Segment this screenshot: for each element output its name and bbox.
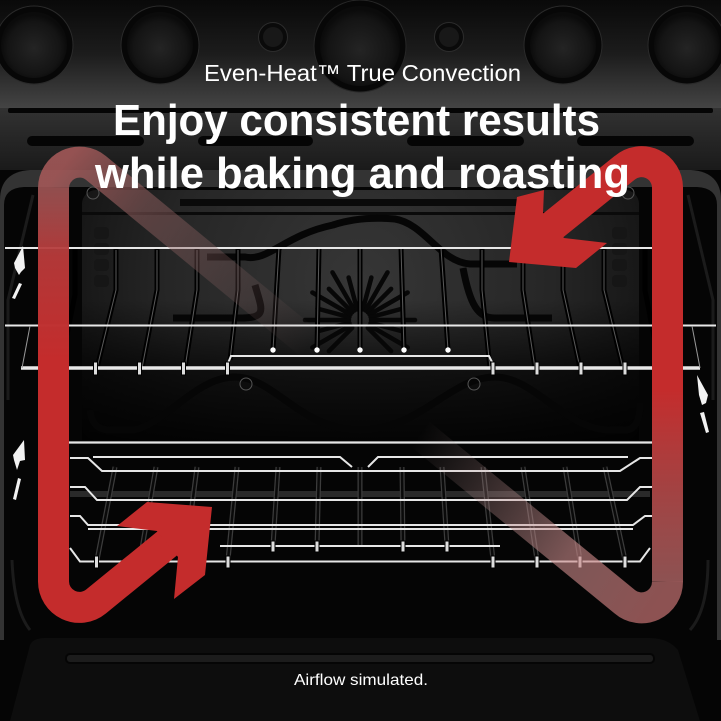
headline: Enjoy consistent results xyxy=(113,96,600,145)
door lower panel xyxy=(10,638,700,721)
arrow: top-right airflow with head xyxy=(509,162,668,390)
control panel xyxy=(0,0,721,108)
footnote: Airflow simulated. xyxy=(294,672,428,689)
arrow: left airflow loop rising xyxy=(54,162,310,360)
headline: while baking and roasting xyxy=(94,149,630,198)
eyebrow title: Even-Heat™ True Convection xyxy=(204,60,521,86)
vent band xyxy=(0,108,721,170)
lower rack rails xyxy=(69,442,652,562)
icon: small white rack-guide arrows xyxy=(12,246,709,500)
heating element xyxy=(90,218,640,430)
upper oven rack xyxy=(5,248,716,375)
arrow: bottom-left airflow with head xyxy=(54,360,212,607)
back shelf bar xyxy=(70,491,650,497)
wall vents xyxy=(94,227,627,287)
control knobs xyxy=(0,0,721,92)
rack front dots xyxy=(270,347,451,353)
rack rails xyxy=(5,248,716,368)
rack tines xyxy=(60,248,660,368)
screws xyxy=(87,187,634,390)
lower rack tines xyxy=(97,467,625,560)
rail clips xyxy=(94,362,627,375)
lower oven rack xyxy=(69,442,652,568)
lower rack clips xyxy=(94,541,627,568)
headline xyxy=(94,96,630,198)
oven cavity xyxy=(0,170,721,640)
convection fan xyxy=(305,265,415,351)
arrow: right airflow loop fading xyxy=(420,390,668,608)
side rack guides xyxy=(8,195,713,630)
